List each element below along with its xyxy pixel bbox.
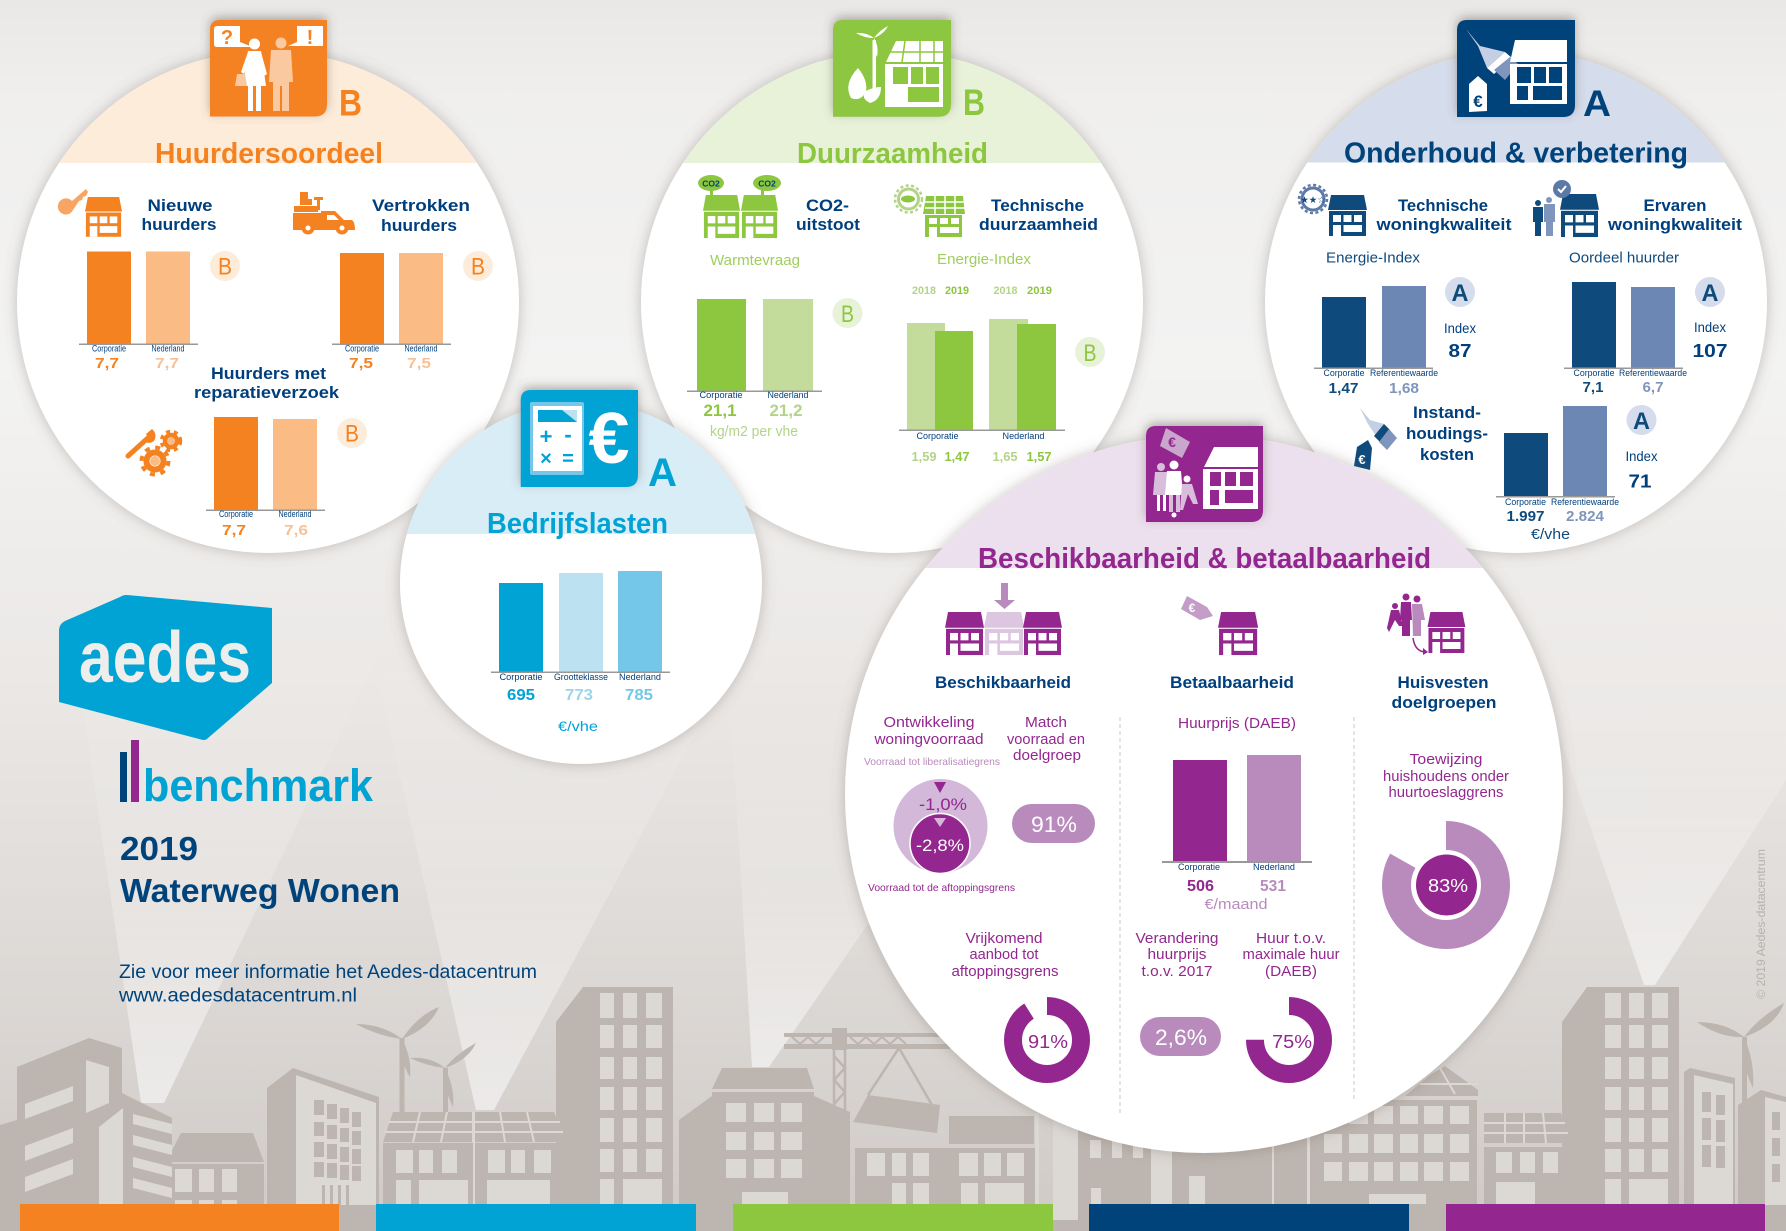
- score badge and index: [1692, 277, 1728, 361]
- column: Betaalbaarheid: maximale huur: [1242, 947, 1340, 963]
- column: Beschikbaarheid: Voorraad tot liberalisatiegrens: [864, 756, 1000, 768]
- bottom colour bars: [20, 1204, 1765, 1231]
- icon: brush and price tag: [1354, 408, 1397, 470]
- bar chart: Corporatie: [1178, 862, 1220, 872]
- title: year and corporation: [120, 830, 400, 909]
- column: Beschikbaarheid: woningvoorraad: [873, 732, 984, 748]
- heading: Bedrijfslasten: [487, 508, 668, 540]
- score badge: B: [471, 254, 485, 280]
- icon: houses with CO2 clouds: CO2: [702, 178, 720, 188]
- score badge: [463, 251, 493, 281]
- sub-panel: Instandhoudingskosten: houdings-: [1406, 424, 1488, 443]
- bar chart: Corporatie: [700, 390, 742, 400]
- bar chart: Corporatie: [916, 431, 958, 441]
- donut chart: 83%: [1396, 836, 1496, 934]
- bar chart: 1,59: [912, 449, 936, 464]
- icon: brush, price tag and house: [1457, 20, 1575, 117]
- icon: brush and price tag: €: [1358, 452, 1366, 467]
- bar chart: [687, 299, 822, 440]
- column: Huisvesten doelgroepen: doelgroepen: [1392, 693, 1496, 712]
- column: Huisvesten doelgroepen: huurtoeslaggrens: [1388, 785, 1504, 801]
- score badge: [832, 298, 862, 328]
- logo: aedes: [59, 595, 272, 740]
- pill: 91%: 91%: [1031, 812, 1077, 837]
- bar chart: Nederland: [619, 672, 661, 682]
- column: Huisvesten doelgroepen: [1383, 594, 1509, 934]
- bar chart: 1,57: [1026, 449, 1052, 464]
- column: Huisvesten doelgroepen: Toewijzing: [1410, 752, 1482, 768]
- title: year and corporation: Waterweg Wonen: [120, 872, 400, 909]
- icon: price tag, family and house: [1146, 426, 1263, 522]
- score letter: B: [339, 82, 362, 124]
- bar chart: Referentiewaarde: [1551, 497, 1619, 507]
- sub-panel: Vertrokken huurders: [293, 192, 493, 372]
- bar chart: 7,6: [284, 522, 308, 539]
- bar chart: [332, 253, 451, 372]
- icon: calculator and euro: [521, 390, 638, 487]
- donut chart: 91%: [1013, 1006, 1081, 1074]
- bar chart: Corporatie: [500, 672, 542, 682]
- subheading: Energie-Index: [1326, 250, 1420, 266]
- icon: quality seal and house: [1299, 185, 1367, 236]
- panel: Onderhoud & verbetering: [1240, 20, 1786, 553]
- bar chart: Nederland: [152, 344, 184, 354]
- pill: 2,6%: 2,6%: [1155, 1025, 1207, 1050]
- bar chart: [79, 252, 198, 372]
- score letter: A: [1583, 83, 1611, 124]
- bar chart: [1314, 286, 1438, 397]
- icon: quality seal and house: ★★☆: [1300, 195, 1326, 206]
- panel: Duurzaamheid: [620, 20, 1160, 553]
- pill: 2,6%: [1140, 1017, 1221, 1056]
- bar chart: 21,2: [770, 401, 802, 420]
- icon: tenants with questions: !: [307, 27, 313, 49]
- column: Betaalbaarheid: [1136, 596, 1340, 1074]
- sub-panel: Nieuwe huurders: [58, 189, 240, 372]
- bar chart: 2019: [945, 285, 969, 297]
- column: Beschikbaarheid: aanbod tot: [970, 947, 1038, 963]
- bar chart: Nederland: [404, 344, 438, 354]
- score badge and index: 107: [1692, 341, 1728, 361]
- bar chart: 7,1: [1582, 379, 1604, 396]
- heading: Beschikbaarheid & betaalbaarheid: [978, 543, 1431, 575]
- score badge: B: [841, 301, 854, 328]
- icon: calculator and euro: ×: [540, 448, 552, 470]
- column: Beschikbaarheid: Match: [1025, 715, 1067, 731]
- bar chart: Nederland: [1253, 862, 1295, 872]
- more information text: Zie voor meer informatie het Aedes-datacentrum: [119, 962, 537, 983]
- icon: sun and solar house: [895, 186, 965, 237]
- panel: Bedrijfslasten: [400, 390, 762, 764]
- bar chart: €/maand: [1204, 896, 1268, 913]
- sub-panel: Technische woningkwaliteit: [1299, 185, 1512, 397]
- bar chart: Nederland: [278, 509, 312, 519]
- score badge and index: A: [1702, 280, 1718, 307]
- donut chart: 75%: [1255, 1006, 1323, 1074]
- column: Betaalbaarheid: (DAEB): [1265, 964, 1317, 980]
- score badge and index: Index: [1444, 320, 1476, 336]
- subheading: Energie-Index: [937, 251, 1031, 268]
- column: Beschikbaarheid: Beschikbaarheid: [935, 673, 1071, 692]
- sub-panel: Technische duurzaamheid: Technische: [991, 196, 1084, 215]
- bar chart: 1,47: [1328, 380, 1358, 397]
- donut chart: 91%: 91%: [1028, 1032, 1068, 1052]
- column: Huisvesten doelgroepen: huishoudens onder: [1383, 769, 1509, 785]
- score badge: [1075, 337, 1105, 367]
- sub-panel: Ervaren woningkwaliteit: [1533, 180, 1742, 396]
- bar chart: 1.997: [1506, 508, 1544, 525]
- score badge: [210, 251, 240, 281]
- bar chart: Corporatie: [345, 344, 379, 354]
- sub-panel: Vertrokken huurders: Vertrokken: [372, 196, 470, 215]
- panel: Huurdersoordeel: [0, 20, 540, 553]
- donut chart: 83%: 83%: [1428, 876, 1468, 896]
- icon: arrow into row houses: [945, 583, 1062, 655]
- sub-panel: Instandhoudingskosten: [1354, 403, 1658, 543]
- bar chart: Grootteklasse: [554, 672, 608, 682]
- icon: people moving to house: [1387, 594, 1465, 655]
- score badge and index: Index: [1626, 448, 1658, 464]
- nested circles: voorraad: -1,0%: [919, 795, 967, 814]
- column: Beschikbaarheid: voorraad en: [1007, 732, 1085, 748]
- more information text: www.aedesdatacentrum.nl: [118, 986, 357, 1006]
- column: Huisvesten doelgroepen: Huisvesten: [1398, 673, 1488, 692]
- bar chart: Nederland: [768, 390, 808, 400]
- skyline: [0, 987, 1786, 1231]
- sub-panel: Technische woningkwaliteit: Technische: [1398, 196, 1488, 215]
- bar chart: €/vhe: [558, 718, 598, 734]
- more information text: [118, 962, 537, 1006]
- sub-panel: Huurders met reparatieverzoek: [128, 364, 367, 539]
- icon: tenants, check badge and house: [1533, 180, 1599, 237]
- bar chart: 785: [625, 687, 653, 704]
- score badge and index: A: [1633, 408, 1650, 435]
- score badge and index: 87: [1448, 341, 1472, 361]
- sub-panel: CO2-uitstoot: CO2-: [806, 196, 849, 215]
- bar chart: 7,7: [222, 522, 246, 539]
- bar chart: 6,7: [1642, 379, 1664, 396]
- icon: price tag and house: €: [1189, 601, 1196, 615]
- column: Betaalbaarheid: t.o.v. 2017: [1142, 964, 1212, 980]
- bar chart: 2.824: [1566, 508, 1605, 525]
- bar chart: 1,47: [944, 449, 970, 464]
- score badge: B: [218, 254, 232, 280]
- bar chart: 7,5: [407, 355, 431, 372]
- light beams: [70, 560, 1786, 1110]
- copyright note: © 2019 Aedes-datacentrum: [1756, 849, 1768, 999]
- icon: brush, price tag and house: €: [1473, 92, 1483, 111]
- bar chart: 695: [507, 687, 535, 704]
- bar chart: 1,68: [1389, 380, 1419, 397]
- sub-panel: Huurders met reparatieverzoek: reparatieverzoek: [194, 383, 340, 402]
- bar chart: [899, 285, 1065, 464]
- score badge: [337, 418, 367, 448]
- column: Beschikbaarheid: aftoppingsgrens: [952, 964, 1058, 980]
- bar chart: Referentiewaarde: [1619, 368, 1687, 378]
- bar chart: [206, 417, 325, 539]
- sub-panel: Ervaren woningkwaliteit: woningkwaliteit: [1607, 215, 1742, 234]
- bar chart: 2018: [994, 285, 1018, 297]
- bar chart: [1564, 282, 1687, 396]
- sub-panel: Instandhoudingskosten: Instand-: [1413, 403, 1481, 422]
- score badge and index: [1444, 277, 1476, 361]
- score badge and index: 71: [1628, 472, 1652, 492]
- logo: benchmark: benchmark: [143, 760, 374, 811]
- sub-panel: Huurders met reparatieverzoek: Huurders met: [211, 364, 326, 383]
- score badge: B: [345, 420, 359, 448]
- column: Beschikbaarheid: Voorraad tot de aftoppingsgrens: [868, 882, 1015, 894]
- bar chart: 2019: [1027, 285, 1052, 297]
- subheading: Oordeel huurder: [1569, 250, 1679, 266]
- bar chart: kg/m2 per vhe: [710, 423, 798, 440]
- heading: Duurzaamheid: [797, 138, 988, 170]
- icon: price tag, family and house: €: [1168, 434, 1176, 450]
- bar chart: €/vhe: [1531, 526, 1570, 543]
- donut chart: 75%: 75%: [1272, 1032, 1312, 1052]
- column: Beschikbaarheid: Vrijkomend: [966, 931, 1042, 947]
- column: Betaalbaarheid: Huurprijs (DAEB): [1178, 716, 1296, 732]
- column: Betaalbaarheid: huurprijs: [1148, 947, 1206, 963]
- bar chart: Corporatie: [219, 509, 253, 519]
- heading: Onderhoud & verbetering: [1344, 138, 1688, 170]
- logo: benchmark: [120, 740, 374, 811]
- bar chart: [1496, 406, 1619, 543]
- score badge and index: Index: [1694, 319, 1726, 335]
- sub-panel: Technische duurzaamheid: duurzaamheid: [979, 215, 1098, 234]
- sub-panel: Technische duurzaamheid: [895, 186, 1105, 464]
- sub-panel: CO2-uitstoot: [687, 175, 862, 440]
- pill: 91%: [1012, 804, 1095, 843]
- bar chart: 773: [565, 687, 593, 704]
- icon: houses with CO2 clouds: [698, 175, 781, 238]
- icon: tenants with questions: [210, 20, 327, 116]
- icon: tenants with questions: ?: [221, 27, 233, 49]
- bar chart: 531: [1260, 878, 1286, 895]
- score badge: B: [1084, 340, 1096, 367]
- column: Betaalbaarheid: Huur t.o.v.: [1256, 931, 1326, 947]
- bar chart: 21,1: [704, 401, 736, 420]
- bar chart: 506: [1187, 878, 1214, 895]
- sub-panel: Nieuwe huurders: huurders: [142, 215, 216, 234]
- logo: aedes: aedes: [79, 618, 251, 698]
- bar chart: Referentiewaarde: [1370, 368, 1438, 378]
- icon: calculator and euro: =: [562, 448, 574, 470]
- sub-panel: Vertrokken huurders: huurders: [381, 216, 457, 235]
- bar chart: [1162, 755, 1312, 913]
- icon: wrench and gears: [128, 429, 180, 474]
- nested circles: voorraad: -2,8%: [916, 836, 964, 855]
- column: Beschikbaarheid: Ontwikkeling: [884, 715, 974, 731]
- bar chart: 7,7: [155, 355, 179, 372]
- icon: calculator and euro: €: [588, 399, 630, 479]
- bar chart: 7,5: [349, 355, 373, 372]
- bar chart: 1,65: [992, 449, 1018, 464]
- icon: turbine, solar panels and house: [833, 20, 951, 117]
- icon: key and house: [58, 189, 122, 237]
- sub-panel: Technische woningkwaliteit: woningkwaliteit: [1375, 215, 1512, 234]
- bar chart: Corporatie: [1574, 368, 1614, 378]
- sub-panel: Nieuwe huurders: Nieuwe: [148, 196, 212, 215]
- column: Beschikbaarheid: [864, 583, 1095, 1074]
- icon: calculator and euro: -: [564, 422, 572, 447]
- bar chart: Corporatie: [1505, 497, 1546, 507]
- sub-panel: CO2-uitstoot: uitstoot: [796, 215, 860, 234]
- score letter: B: [963, 82, 985, 123]
- nested circles: voorraad: [894, 779, 988, 874]
- column: Betaalbaarheid: Verandering: [1136, 931, 1218, 947]
- panel: Beschikbaarheid & betaalbaarheid: [840, 426, 1570, 1153]
- icon: price tag and house: [1181, 596, 1258, 655]
- bar chart: 7,7: [95, 355, 119, 372]
- title: year and corporation: 2019: [120, 830, 198, 867]
- bar chart: Corporatie: [92, 344, 126, 354]
- bar chart: 2018: [912, 285, 936, 297]
- bar chart: [491, 571, 670, 734]
- icon: calculator and euro: +: [540, 424, 552, 449]
- score letter: A: [648, 451, 677, 495]
- sub-panel: Instandhoudingskosten: kosten: [1420, 445, 1474, 464]
- icon: moving truck: [293, 192, 355, 234]
- column: Beschikbaarheid: doelgroep: [1013, 748, 1081, 764]
- icon: houses with CO2 clouds: CO2: [758, 178, 776, 188]
- score badge and index: A: [1452, 280, 1468, 307]
- bar chart: Nederland: [1002, 431, 1044, 441]
- column: Betaalbaarheid: Betaalbaarheid: [1170, 673, 1294, 692]
- score badge and index: [1626, 405, 1658, 492]
- subheading: Warmtevraag: [710, 252, 800, 269]
- sub-panel: Ervaren woningkwaliteit: Ervaren: [1644, 196, 1706, 215]
- bar chart: Corporatie: [1324, 368, 1364, 378]
- heading: Huurdersoordeel: [155, 138, 383, 170]
